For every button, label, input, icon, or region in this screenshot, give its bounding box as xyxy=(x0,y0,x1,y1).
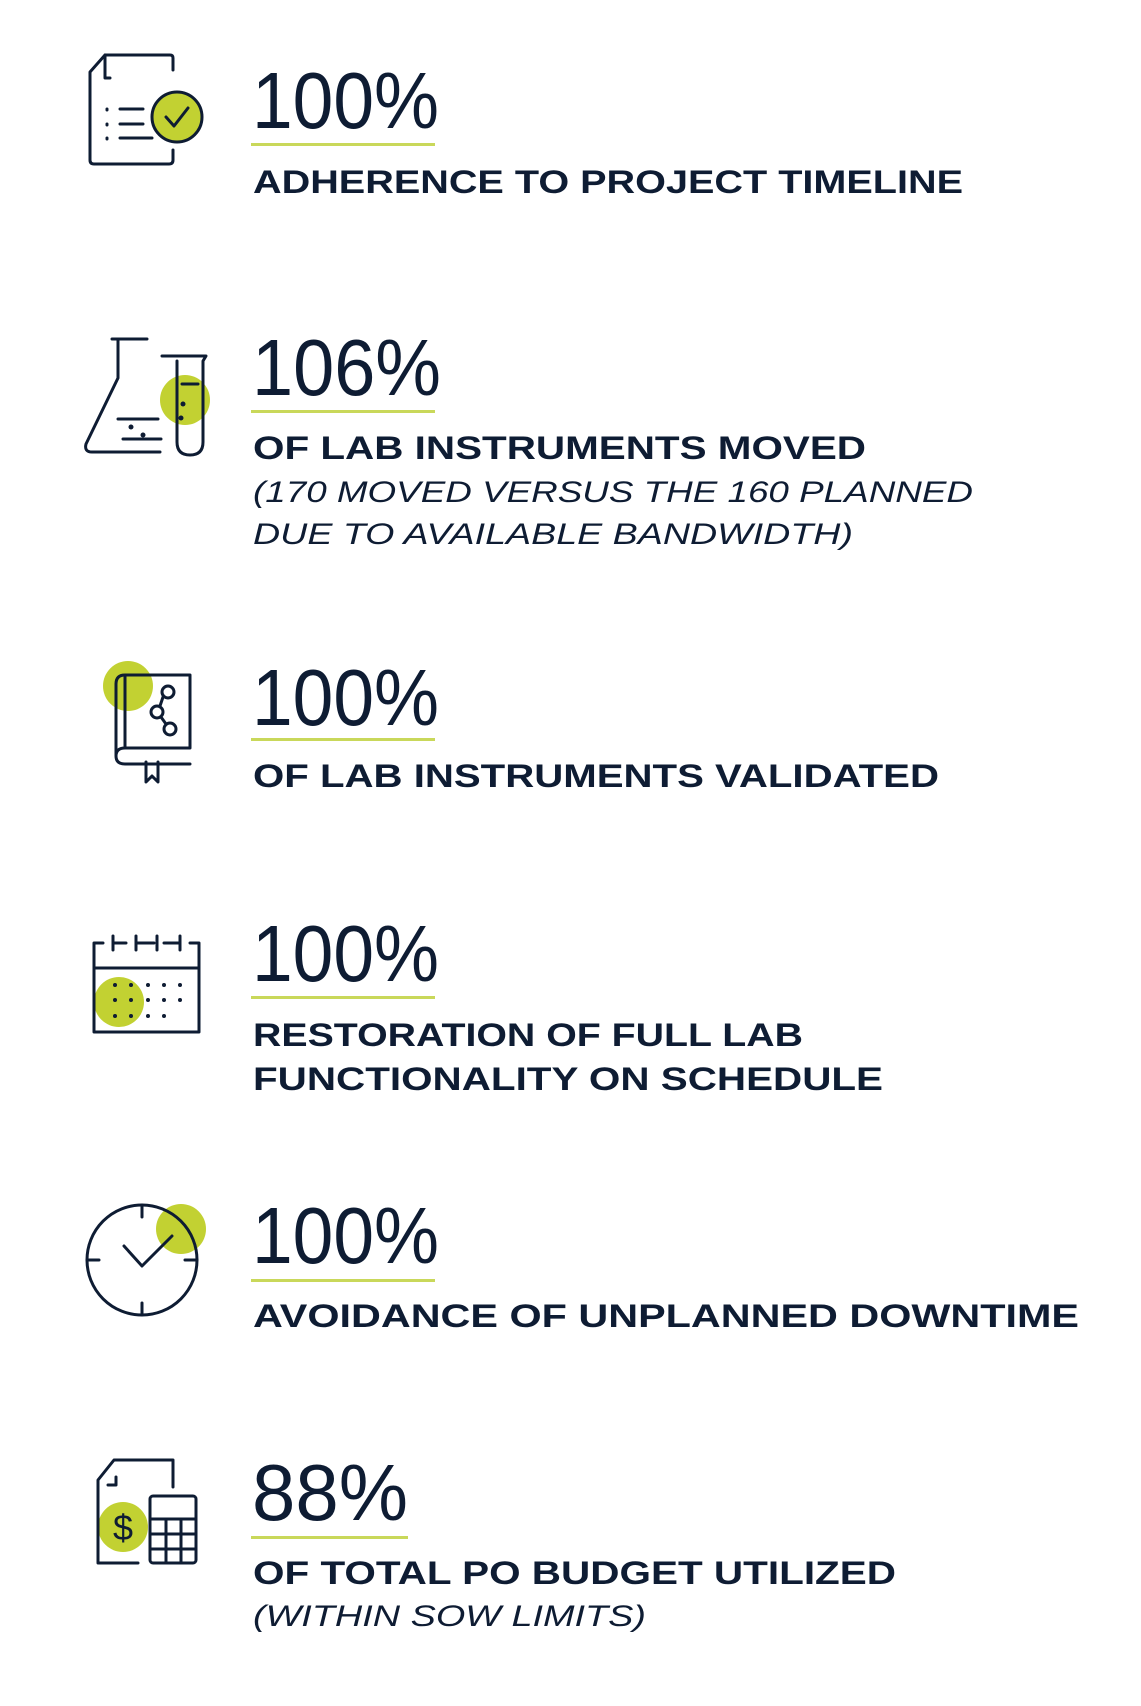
row 2: lab instruments moved xyxy=(86,323,973,551)
row 2: lab instruments moved: DUE TO AVAILABLE BANDWIDTH) xyxy=(253,518,853,551)
label: OF LAB INSTRUMENTS VALIDATED xyxy=(253,758,939,794)
label: OF LAB INSTRUMENTS MOVED xyxy=(253,430,866,466)
label: OF TOTAL PO BUDGET UTILIZED xyxy=(253,1555,896,1591)
label: AVOIDANCE OF UNPLANNED DOWNTIME xyxy=(253,1298,1079,1334)
row 6: budget xyxy=(98,1448,896,1633)
note: (WITHIN SOW LIMITS) xyxy=(253,1600,646,1633)
number: 100%: 100% xyxy=(252,1191,439,1280)
row 4: restoration xyxy=(94,909,883,1097)
icon: flask and test tube xyxy=(86,339,210,455)
icon: clock xyxy=(87,1204,206,1315)
number: 100%: 100% xyxy=(252,653,439,742)
note: (170 MOVED VERSUS THE 160 PLANNED xyxy=(253,476,973,509)
number: 100%: 100% xyxy=(252,909,439,998)
label: RESTORATION OF FULL LAB xyxy=(253,1017,803,1053)
number: 106%: 106% xyxy=(252,323,441,412)
number: 100%: 100% xyxy=(252,56,439,145)
icon: calendar xyxy=(94,936,199,1032)
icon: book with network xyxy=(103,661,190,782)
row 1: project timeline xyxy=(90,55,963,200)
icon: invoice and calculator xyxy=(98,1460,196,1563)
row 3: instruments validated xyxy=(103,653,939,794)
number: 88%: 88% xyxy=(252,1448,408,1537)
row 4: restoration: FUNCTIONALITY ON SCHEDULE xyxy=(253,1061,883,1097)
icon: invoice and calculator: $ xyxy=(113,1507,133,1548)
row 5: downtime xyxy=(87,1191,1079,1334)
icon: document with check xyxy=(90,55,202,164)
label: ADHERENCE TO PROJECT TIMELINE xyxy=(253,164,963,200)
